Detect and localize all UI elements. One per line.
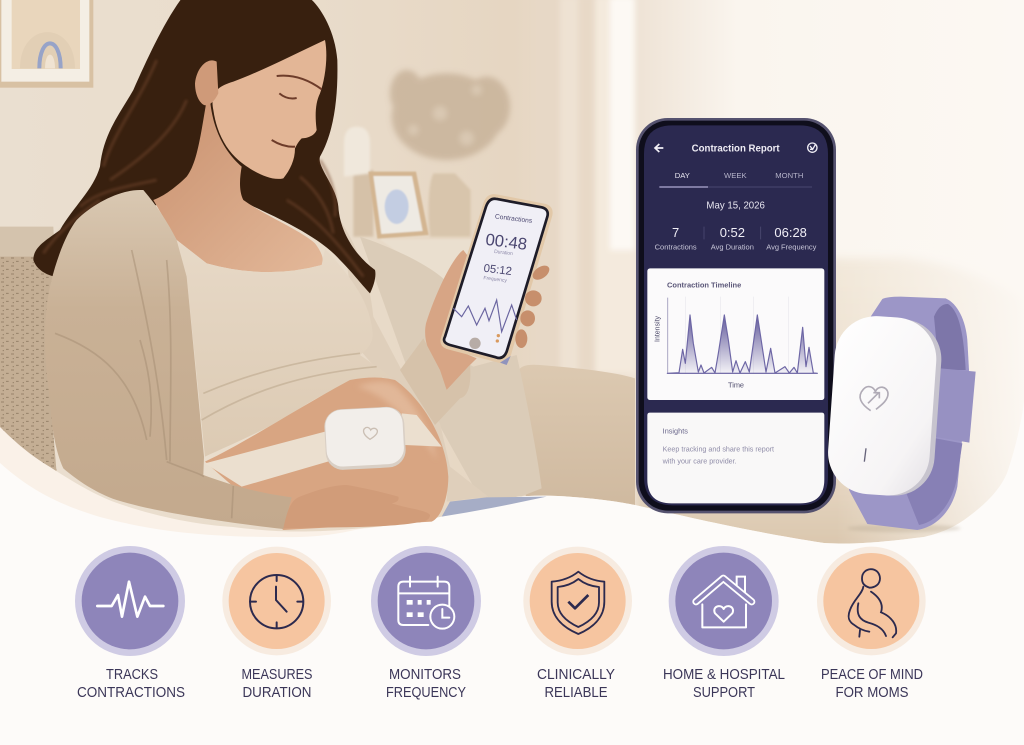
area chart xyxy=(667,315,817,373)
ear xyxy=(195,60,218,105)
side table xyxy=(380,239,472,283)
hair strands xyxy=(43,60,363,277)
wearable with strap, in 3x-scaled local coordinates xyxy=(825,297,976,532)
small phone readouts: Contractions xyxy=(495,213,533,225)
dried flowers xyxy=(390,70,510,160)
main app phone, in 3x-scaled local coordinates: Contractions xyxy=(655,243,697,252)
label: home and hospital support: SUPPORT xyxy=(693,685,755,701)
background room scene xyxy=(0,0,1024,560)
icon: shield xyxy=(523,547,632,655)
small phone readouts: 05:12 xyxy=(483,263,512,278)
main app phone, in 3x-scaled local coordinates: Contraction Timeline xyxy=(667,281,741,290)
icon: house xyxy=(669,546,779,656)
main app phone, in 3x-scaled local coordinates: with your care provider. xyxy=(662,457,737,465)
sleeve cuff xyxy=(400,338,470,425)
icon: pulse xyxy=(75,546,185,656)
jeans xyxy=(442,497,547,517)
label: measures duration xyxy=(242,667,313,701)
label: peace of mind for moms xyxy=(821,667,923,701)
sofa arm xyxy=(518,365,635,510)
timeline card xyxy=(647,268,824,400)
knit pillow right xyxy=(360,237,542,510)
main app phone, in 3x-scaled local coordinates: Contraction Report xyxy=(692,143,780,154)
insights card xyxy=(647,413,824,503)
small phone controls xyxy=(469,338,481,349)
small phone readouts xyxy=(483,213,533,284)
label: measures duration: DURATION xyxy=(242,685,312,701)
stats: 7 xyxy=(672,225,679,240)
framed photo on table xyxy=(368,172,429,239)
tabs xyxy=(675,171,803,180)
small phone readouts: Duration xyxy=(494,249,513,257)
icon: pregnant mother xyxy=(817,547,926,655)
chart axis xyxy=(668,298,818,373)
export icon xyxy=(808,143,817,152)
cardigan folds xyxy=(55,250,233,518)
label: measures duration: MEASURES xyxy=(242,667,313,683)
main app phone, in 3x-scaled local coordinates: Avg Frequency xyxy=(766,243,817,252)
feature icons, first three xyxy=(75,546,481,656)
sofa back left xyxy=(0,227,57,300)
right surface xyxy=(636,258,1024,560)
axis labels: Time xyxy=(728,380,744,389)
knit cushion left xyxy=(0,257,57,473)
icon: calendar xyxy=(371,546,481,656)
stats: 06:28 xyxy=(774,225,807,240)
lower hand xyxy=(283,485,430,528)
label: home and hospital support: HOME & HOSPITAL xyxy=(663,667,785,683)
framed picture xyxy=(0,0,93,88)
neck and chest xyxy=(153,100,323,272)
purple strap xyxy=(849,297,976,530)
arched mirror xyxy=(344,127,373,237)
facial features xyxy=(272,76,322,147)
tabs: WEEK xyxy=(724,171,747,180)
vase xyxy=(429,173,471,237)
label: clinically reliable: CLINICALLY xyxy=(537,667,615,683)
date: May 15, 2026 xyxy=(706,201,765,212)
ground shadow xyxy=(847,524,961,532)
stats: 0:52 xyxy=(720,225,745,240)
label: monitors frequency: FREQUENCY xyxy=(386,685,466,701)
fingers xyxy=(515,263,552,348)
label: tracks contractions: CONTRACTIONS xyxy=(77,685,185,701)
right cardigan strip xyxy=(340,220,488,502)
hair xyxy=(33,0,375,293)
tank top xyxy=(177,240,393,457)
label: clinically reliable xyxy=(537,667,615,701)
label: monitors frequency xyxy=(386,667,466,701)
main app phone, in 3x-scaled local coordinates xyxy=(636,118,836,513)
main app phone, in 3x-scaled local coordinates: Keep tracking and share this report xyxy=(663,446,774,454)
belly xyxy=(205,377,448,530)
woman xyxy=(33,0,553,530)
heart logo xyxy=(860,387,888,411)
main app phone, in 3x-scaled local coordinates: Insights xyxy=(663,426,688,435)
belly highlight xyxy=(357,382,437,460)
belt xyxy=(205,413,442,487)
big wearable device xyxy=(825,313,944,498)
label: home and hospital support xyxy=(663,667,785,701)
left cardigan xyxy=(45,190,292,529)
label: peace of mind for moms: FOR MOMS xyxy=(836,685,909,701)
main app phone, in 3x-scaled local coordinates: Avg Duration xyxy=(711,243,754,252)
small handheld phone xyxy=(440,194,553,365)
label: tracks contractions: TRACKS xyxy=(106,667,158,683)
face xyxy=(212,40,326,179)
white lower panel xyxy=(0,400,1024,745)
curtain xyxy=(537,0,635,373)
tank folds xyxy=(202,353,377,420)
tabs: DAY xyxy=(675,171,690,180)
small phone readouts: Frequency xyxy=(483,275,508,284)
header xyxy=(655,144,663,152)
label: clinically reliable: RELIABLE xyxy=(544,685,608,701)
main app phone, in 3x-scaled local coordinates: Intensity xyxy=(654,315,661,342)
label: monitors frequency: MONITORS xyxy=(389,667,461,683)
label: tracks contractions xyxy=(77,667,185,701)
small phone waveform xyxy=(453,300,517,332)
icon: clock xyxy=(222,547,331,655)
small phone readouts: 00:48 xyxy=(484,230,528,254)
upper hand xyxy=(425,250,477,390)
curved cream edge xyxy=(0,400,1024,745)
grid lines xyxy=(686,297,788,373)
wearable device on belly xyxy=(323,406,407,471)
feature labels xyxy=(77,667,923,701)
label: peace of mind for moms: PEACE OF MIND xyxy=(821,667,923,683)
indicator light xyxy=(864,448,866,462)
stats xyxy=(672,225,807,240)
tabs: MONTH xyxy=(775,171,803,180)
feature icons, last three xyxy=(523,546,926,656)
